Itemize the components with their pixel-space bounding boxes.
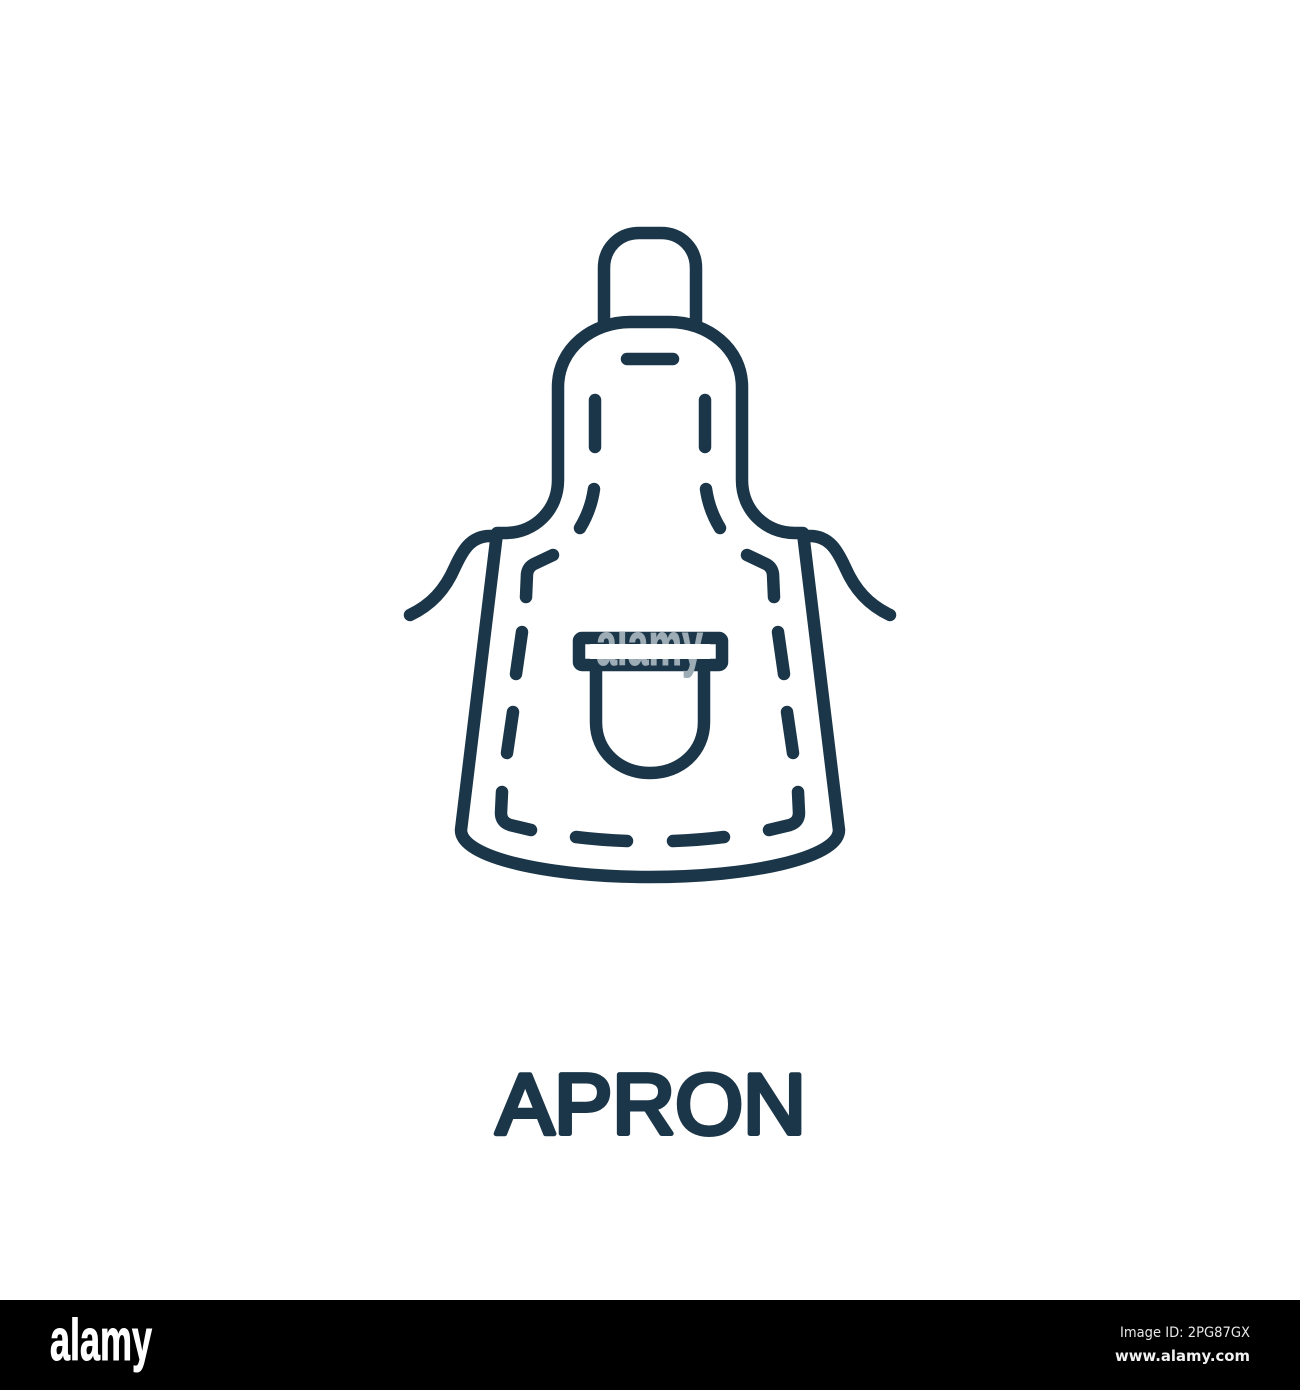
footer bar (0, 1300, 1300, 1390)
right waist tie (803, 536, 890, 615)
image id: Image ID: 2PG87GX (1120, 1325, 1250, 1341)
neck strap (604, 233, 696, 324)
footer logo: alamy (50, 1308, 152, 1373)
pocket flap (579, 638, 722, 665)
watermark: alamy (590, 632, 710, 678)
apron body outline (461, 322, 839, 877)
left waist tie (410, 536, 497, 615)
icon: apron (410, 233, 890, 877)
stitching (501, 359, 799, 841)
title: APRON (496, 1058, 806, 1152)
pocket (596, 668, 704, 773)
website: www.alamy.com (1115, 1347, 1250, 1365)
watermark: alamy: alamy (596, 611, 703, 678)
